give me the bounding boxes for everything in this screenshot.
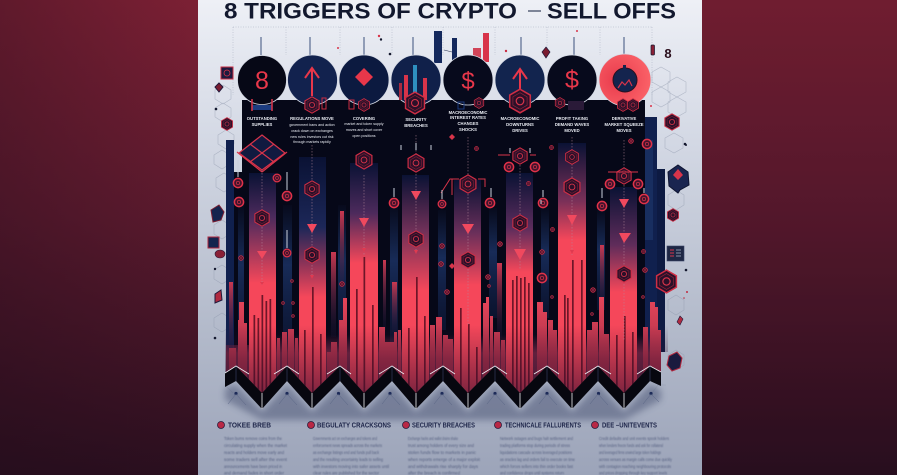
circle icons <box>252 65 639 114</box>
base red between columns <box>226 337 650 380</box>
zigzag chevron band <box>225 366 661 409</box>
side icons left <box>208 67 233 339</box>
small arrow tips <box>260 248 574 285</box>
icon: dark globe <box>613 65 637 92</box>
bottom section: regulatory crackdowns: BEGULATY CRACKSONS <box>317 422 391 430</box>
bottom section: regulatory crackdowns: enforcement news spreads across the markets <box>313 443 382 449</box>
bottom section: token burns: some traders sell after the event <box>224 457 288 463</box>
column captions: crack down on exchanges <box>291 129 333 133</box>
column markers <box>233 134 652 340</box>
column captions: moves and short cover <box>346 128 383 132</box>
bottom section: token burns: announcements have been priced in <box>224 464 282 470</box>
column hexagons <box>255 148 631 282</box>
bottom section: token burns <box>218 422 288 475</box>
bottom section: regulatory crackdowns: and the resulting uncertainty leads to selling <box>313 457 383 463</box>
column captions: DEMAND WAVES <box>555 122 589 127</box>
bottom section: security breaches: when reports emerge of a major exploit <box>408 457 481 463</box>
column captions: DERIVATIVE <box>612 116 636 121</box>
icon: red bracket <box>252 99 272 111</box>
column captions: MACROECONOMIC <box>449 110 487 115</box>
column captions: COVERING <box>353 116 375 121</box>
white ring stems <box>238 143 644 248</box>
bottom section: regulatory crackdowns <box>308 422 391 475</box>
column captions: new rules investors cut risk <box>290 135 334 139</box>
candlestick chart behind title <box>434 31 489 63</box>
column captions: CHANGES <box>458 121 479 126</box>
side icons right <box>657 114 689 371</box>
dark stripes inside columns <box>254 257 634 401</box>
top scattered marks <box>337 30 687 146</box>
bottom section: security breaches <box>402 422 481 475</box>
satellite rings <box>233 134 652 318</box>
icon: dollar right: $ <box>565 66 579 94</box>
dotted grid frame <box>233 27 652 95</box>
bottom section: debt events: and leveraged firms unwind large token holdings <box>599 450 661 456</box>
bottom section: debt events: when lenders freeze funds and ask for collateral <box>599 443 663 449</box>
bottom section: technical failures: TECHNICALE FALLURENTS <box>505 422 581 430</box>
orthogonal connector lines <box>441 155 638 195</box>
bottom section: debt events: DEE –UNITEVENTS <box>602 422 657 430</box>
bottom section: token burns: Token burns remove coins from the <box>224 436 282 442</box>
column captions: PROFIT TAKING <box>556 116 588 121</box>
tall thin bars <box>229 211 604 350</box>
bottom section: technical failures: trading platforms stop during periods of stress <box>500 443 570 449</box>
column captions: MOVES <box>616 128 632 133</box>
column captions: SUPPLIES <box>252 122 273 127</box>
icons: top row hexagons <box>305 89 639 114</box>
column captions: open positions <box>352 134 376 138</box>
bottom section: regulatory crackdowns: with investors moving into safer assets until <box>313 464 389 470</box>
column captions: OUTSTANDING <box>247 116 277 121</box>
bottom section: security breaches: and withdrawals rise sharply for days <box>408 464 479 470</box>
decorative hexagon lattice left and right <box>214 67 686 393</box>
bottom section: token burns: reacts and holders move early and <box>224 450 284 456</box>
icon: up arrow right <box>513 69 527 92</box>
column captions: INTEREST RATES <box>450 115 486 120</box>
column 1 lattice diamonds <box>237 135 287 172</box>
column captions: government bans and action <box>289 123 335 127</box>
bottom section: debt events: with contagion reaching neighbouring protocols <box>599 464 671 470</box>
bottom section: debt events: across venues as margin calls come due quickly <box>599 457 672 463</box>
column captions: SECURITY <box>405 117 427 122</box>
dark column glow stripes <box>238 140 653 355</box>
icon: up arrow left <box>305 68 319 96</box>
icon: dollar left: $ <box>461 68 475 95</box>
bottom section: technical failures: as oracles lag and orders fail to execute on time <box>500 457 575 463</box>
column captions: through markets rapidly <box>293 140 331 144</box>
column captions: SHOCKS <box>459 127 477 132</box>
icon: red diamond <box>355 68 373 86</box>
bottom section: security breaches: SECURITY BREACHES <box>412 422 475 430</box>
title <box>224 0 676 24</box>
gradient trigger columns <box>249 143 637 400</box>
down arrows <box>257 191 631 260</box>
column captions <box>247 110 644 144</box>
bottom section: technical failures: which forces sellers into thin order books fast <box>500 464 574 470</box>
bottom section: security breaches: stolen funds flow to markets in panic <box>408 450 477 456</box>
bottom section: regulatory crackdowns: Governments act on exchanges and tokens and <box>313 436 377 442</box>
column captions: market and token supply <box>344 122 384 126</box>
red bars between columns <box>229 297 661 379</box>
column captions: DOWNTURNS <box>506 122 534 127</box>
trigger circles row <box>238 54 651 106</box>
poster panel <box>198 0 702 475</box>
column captions: MARKET SQUEEZE <box>604 122 644 127</box>
column captions: MOVED <box>564 128 580 133</box>
bottom section: security breaches: Exchange hacks and wallet drains shake <box>408 436 458 442</box>
bottom section: technical failures: Network outages and bugs halt settlement and <box>500 436 573 442</box>
bottom section: technical failures <box>494 422 581 475</box>
bottom section: token burns: TOKEE BREB <box>228 422 271 430</box>
top scattered marks: 8 <box>664 46 672 61</box>
bottom section: token burns: circulating supply when the market <box>224 443 288 449</box>
column captions: REGULATIONS MOVE <box>290 116 334 121</box>
icon: bar chart <box>399 65 427 100</box>
column captions: MACROECONOMIC <box>501 116 539 121</box>
bottom section: debt events: Credit defaults and unit events spook holders <box>599 436 669 442</box>
zigzag shadow <box>225 384 661 420</box>
bottom section: debt events <box>592 422 672 475</box>
anchor dots below zigzag <box>228 392 659 405</box>
dark chart body <box>225 100 668 402</box>
column captions: DRIVES <box>512 128 528 133</box>
lower fade overlay <box>225 330 668 393</box>
icon: number 8: 8 <box>255 67 269 95</box>
column connectors <box>262 135 624 340</box>
column captions: BREACHES <box>404 123 428 128</box>
bottom section: technical failures: liquidations cascade across leveraged positions <box>500 450 572 456</box>
bottom section: regulatory crackdowns: as exchange listings end and funds pull back <box>313 450 379 456</box>
bottom section: security breaches: trust among holders of every size and <box>408 443 474 449</box>
icon stems above circles <box>261 37 624 55</box>
